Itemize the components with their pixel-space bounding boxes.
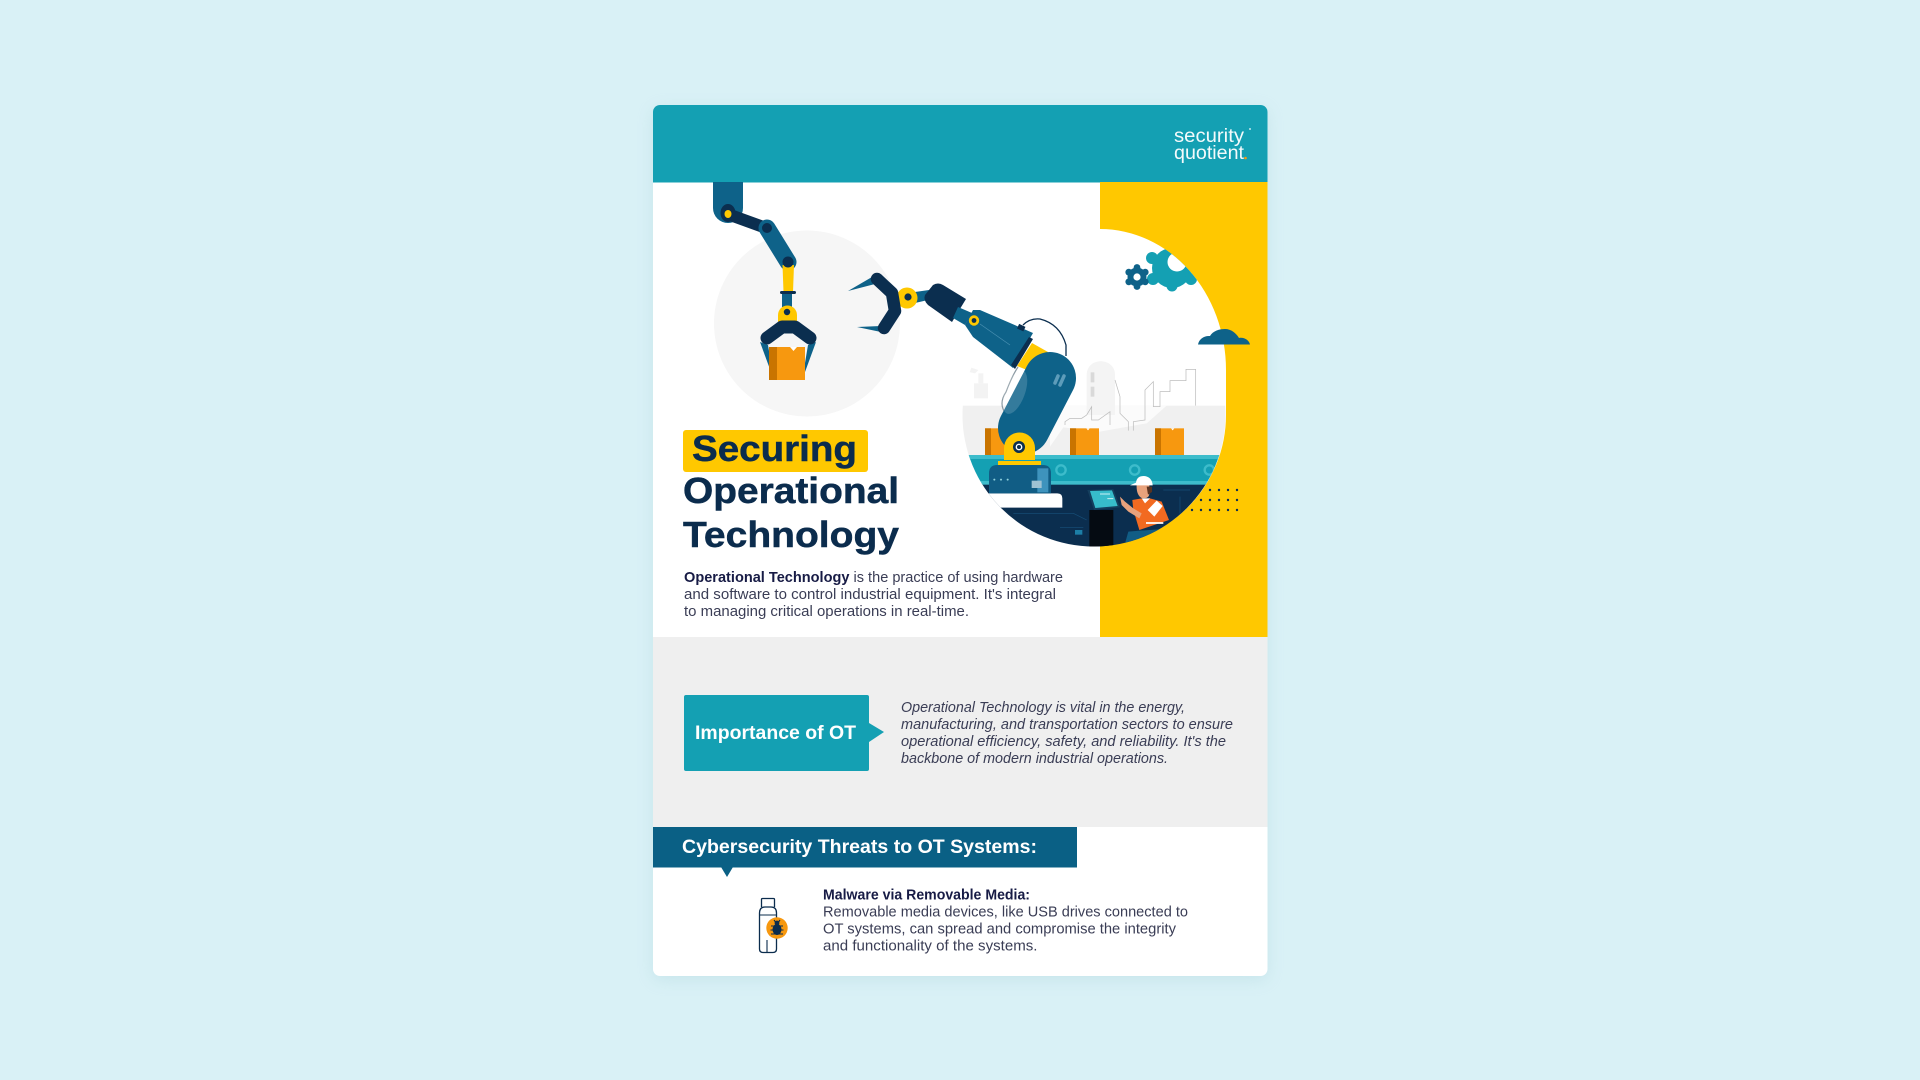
panel: hero <box>713 182 1268 637</box>
logo: security <box>1174 126 1245 147</box>
threat text: Malware via Removable Media: <box>823 888 1030 904</box>
box held <box>777 347 805 380</box>
claw <box>767 327 810 338</box>
intro text: and software to control industrial equipment. It's integral <box>684 587 1056 603</box>
dark wrist <box>924 284 966 322</box>
dark floor <box>982 483 1206 546</box>
importance description <box>901 700 1233 767</box>
callout box <box>684 695 884 771</box>
gripper and upper arm <box>848 277 1066 465</box>
grey backdrop <box>962 406 1226 455</box>
circuit traces <box>1013 490 1190 527</box>
title highlight <box>683 430 868 472</box>
white floor strip <box>988 493 1062 508</box>
threat: malware via removable media <box>760 888 1188 954</box>
capsule forearm <box>1024 378 1050 428</box>
logo <box>1174 126 1251 164</box>
pale chimney sketch <box>970 368 988 398</box>
importance description: manufacturing, and transportation sectors to ensure <box>901 717 1233 733</box>
threat text: Removable media devices, like USB drives connected to <box>823 904 1188 920</box>
yellow elbow <box>1017 343 1048 372</box>
title: Securing <box>692 428 857 469</box>
threat text: OT systems, can spread and compromise the integrity <box>823 922 1177 938</box>
fingers <box>760 342 769 366</box>
conveyor belt <box>968 455 1220 482</box>
threat text: and functionality of the systems. <box>823 938 1038 954</box>
factory scene <box>962 362 1226 546</box>
claw <box>877 279 895 328</box>
forearm <box>965 310 1033 368</box>
threat text <box>823 888 1188 954</box>
icon: USB drive with bug <box>760 898 788 952</box>
importance description: Operational Technology is vital in the energy, <box>901 700 1185 716</box>
pale circle behind top arm <box>714 230 900 416</box>
gripper spikes <box>848 277 875 291</box>
header band <box>653 105 1268 182</box>
infographic card <box>653 105 1268 976</box>
heading: cybersecurity threats: Cybersecurity Threats to OT Systems: <box>682 837 1037 858</box>
boxes on belt <box>985 428 1184 455</box>
top robotic arm holding box <box>713 182 816 380</box>
icon: cloud <box>1198 329 1250 344</box>
yellow joint <box>896 288 918 308</box>
importance description: operational efficiency, safety, and reliability. It's the <box>901 734 1226 750</box>
arm base block <box>989 465 1051 493</box>
callout box: Importance of OT <box>695 723 856 744</box>
worker <box>1120 476 1169 543</box>
title <box>683 428 899 555</box>
title: Technology <box>683 514 899 555</box>
decorative dot grid <box>1191 489 1238 511</box>
control terminal <box>1089 510 1113 547</box>
logo: quotient <box>1174 143 1245 164</box>
panel: importance of OT <box>653 637 1268 827</box>
heading: cybersecurity threats <box>653 827 1077 877</box>
intro text: Operational Technology is the practice of using hardware <box>684 570 1063 586</box>
importance description: backbone of modern industrial operations. <box>901 751 1168 767</box>
yellow mount <box>1004 432 1035 460</box>
intro text <box>684 570 1063 620</box>
intro text: to managing critical operations in real-time. <box>684 604 969 620</box>
pale tower <box>1087 362 1115 406</box>
card shadow <box>653 109 1268 980</box>
city outline <box>1065 369 1196 431</box>
icon: small and large gears <box>1125 249 1197 292</box>
connector <box>915 290 929 303</box>
card background <box>653 105 1268 976</box>
yellow side panel <box>1100 182 1268 637</box>
title: Operational <box>683 470 899 511</box>
white rounded cut-out <box>1100 229 1226 546</box>
cable <box>1023 319 1066 356</box>
